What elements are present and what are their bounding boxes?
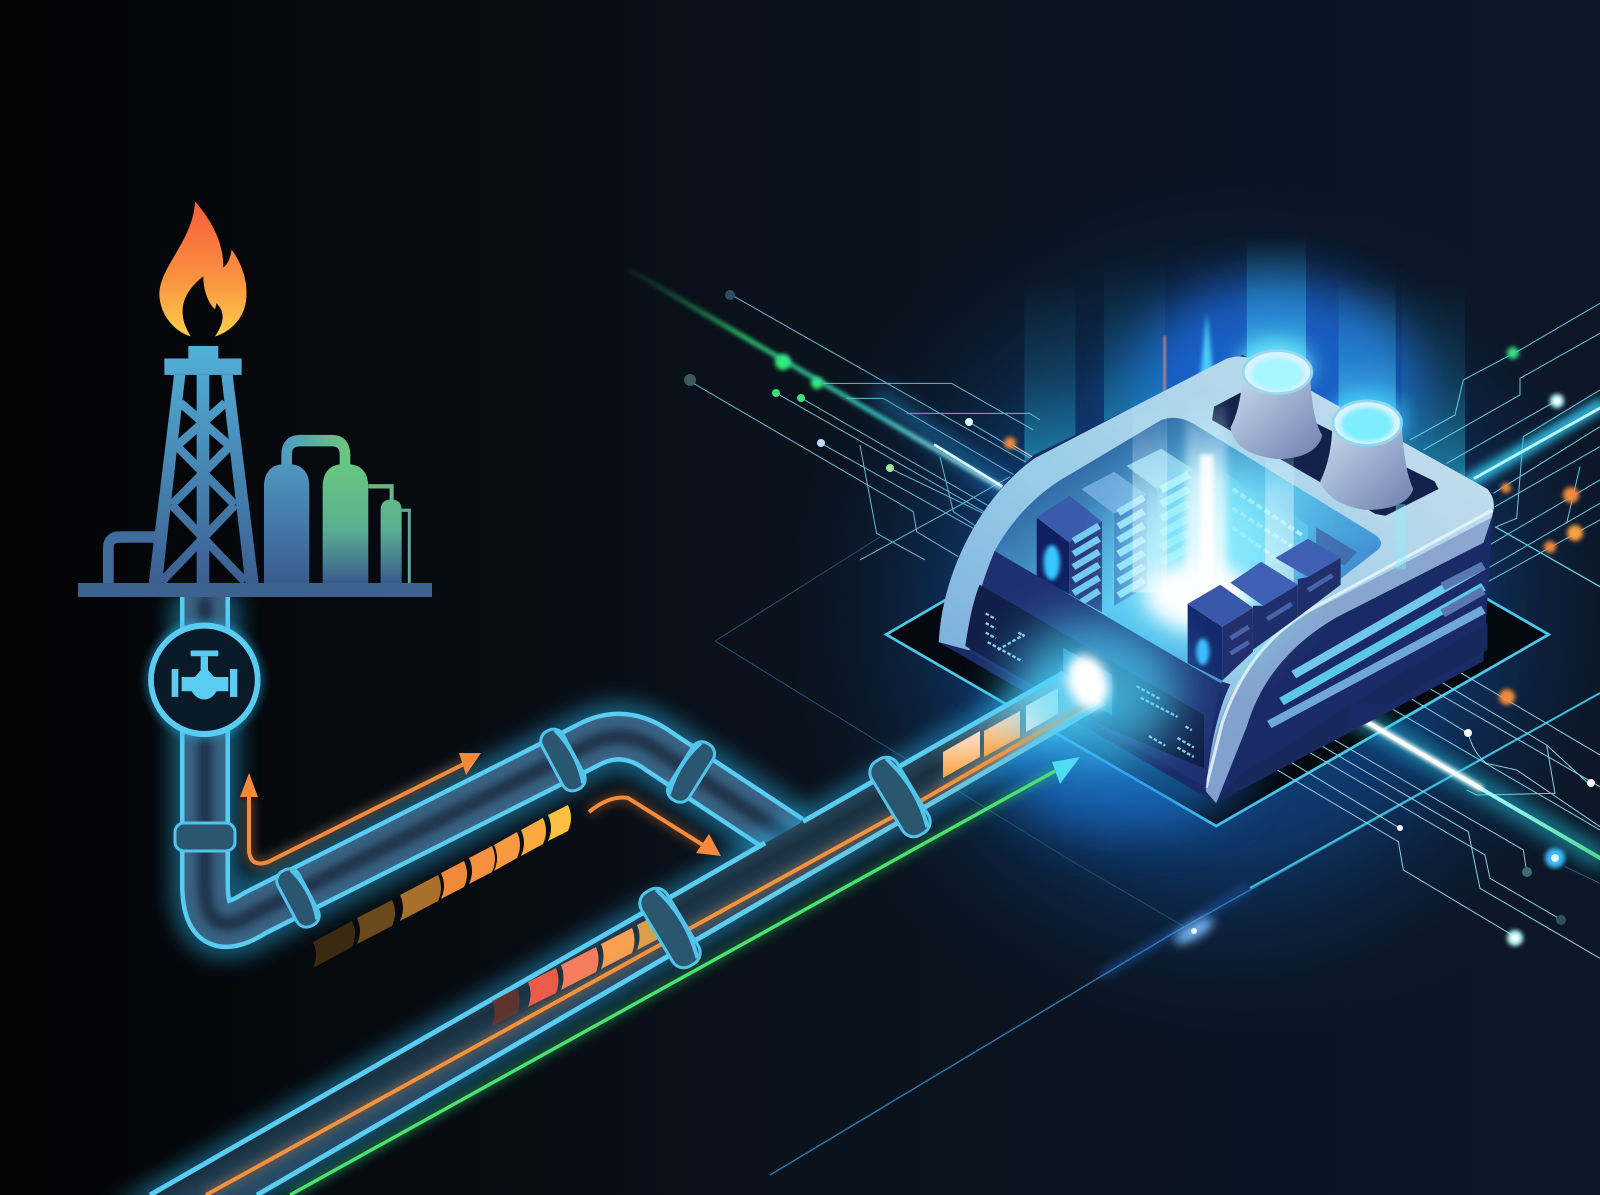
front wall [969, 551, 1221, 788]
long cyan floor line [715, 537, 1600, 1175]
flow chunks beneath the branch pipe [313, 805, 571, 968]
circuit traces, upper right [1410, 303, 1600, 587]
circuit traces, upper left [693, 296, 1040, 560]
orange gas line [206, 700, 1095, 1195]
open court [994, 418, 1381, 684]
roof edge bevel [1206, 518, 1492, 803]
back row server racks [1037, 449, 1357, 612]
glow on the floor beside the pipe entry [990, 690, 1250, 830]
main transmission pipe [150, 673, 1104, 1195]
floor diamond under the building [886, 443, 1549, 826]
lower right base block [1216, 623, 1488, 803]
pipe doorway [1063, 648, 1112, 715]
front row server racks [1188, 539, 1341, 680]
light beams rising from the building [1024, 236, 1465, 508]
orange arrow: up and along the pipe [240, 753, 481, 864]
cooling tower, rear [1230, 351, 1322, 459]
separator tanks and piping [108, 441, 409, 583]
pipe flanges on the branch [175, 725, 719, 931]
circuit traces, lower right [1272, 668, 1600, 958]
tower well [1212, 389, 1439, 516]
gas chunks in the main pipe [492, 688, 1058, 1026]
valve in a ring [151, 626, 258, 734]
lit notch below the building [1350, 683, 1390, 722]
bright light streaks [630, 270, 1600, 858]
data centre building [939, 351, 1494, 803]
roof edge highlight [1206, 510, 1492, 788]
cooling tower, front [1320, 401, 1413, 510]
green signal line with arrow [290, 757, 1080, 1195]
main pipe flanges [635, 752, 935, 973]
orange arrow: bend toward the main pipe [589, 798, 721, 856]
court glow and central light column [1124, 393, 1406, 654]
gas flare flame [159, 201, 247, 336]
side vent stripes [1269, 566, 1483, 724]
branch pipe with elbows [205, 596, 790, 924]
glowing node dots [684, 290, 1595, 948]
pipe entry glow at the building [1010, 620, 1180, 760]
derrick tower [149, 346, 259, 584]
lower front panels [965, 585, 1204, 769]
building body [939, 355, 1494, 803]
platform deck [78, 583, 432, 597]
roof slab and front arch [939, 356, 1494, 803]
